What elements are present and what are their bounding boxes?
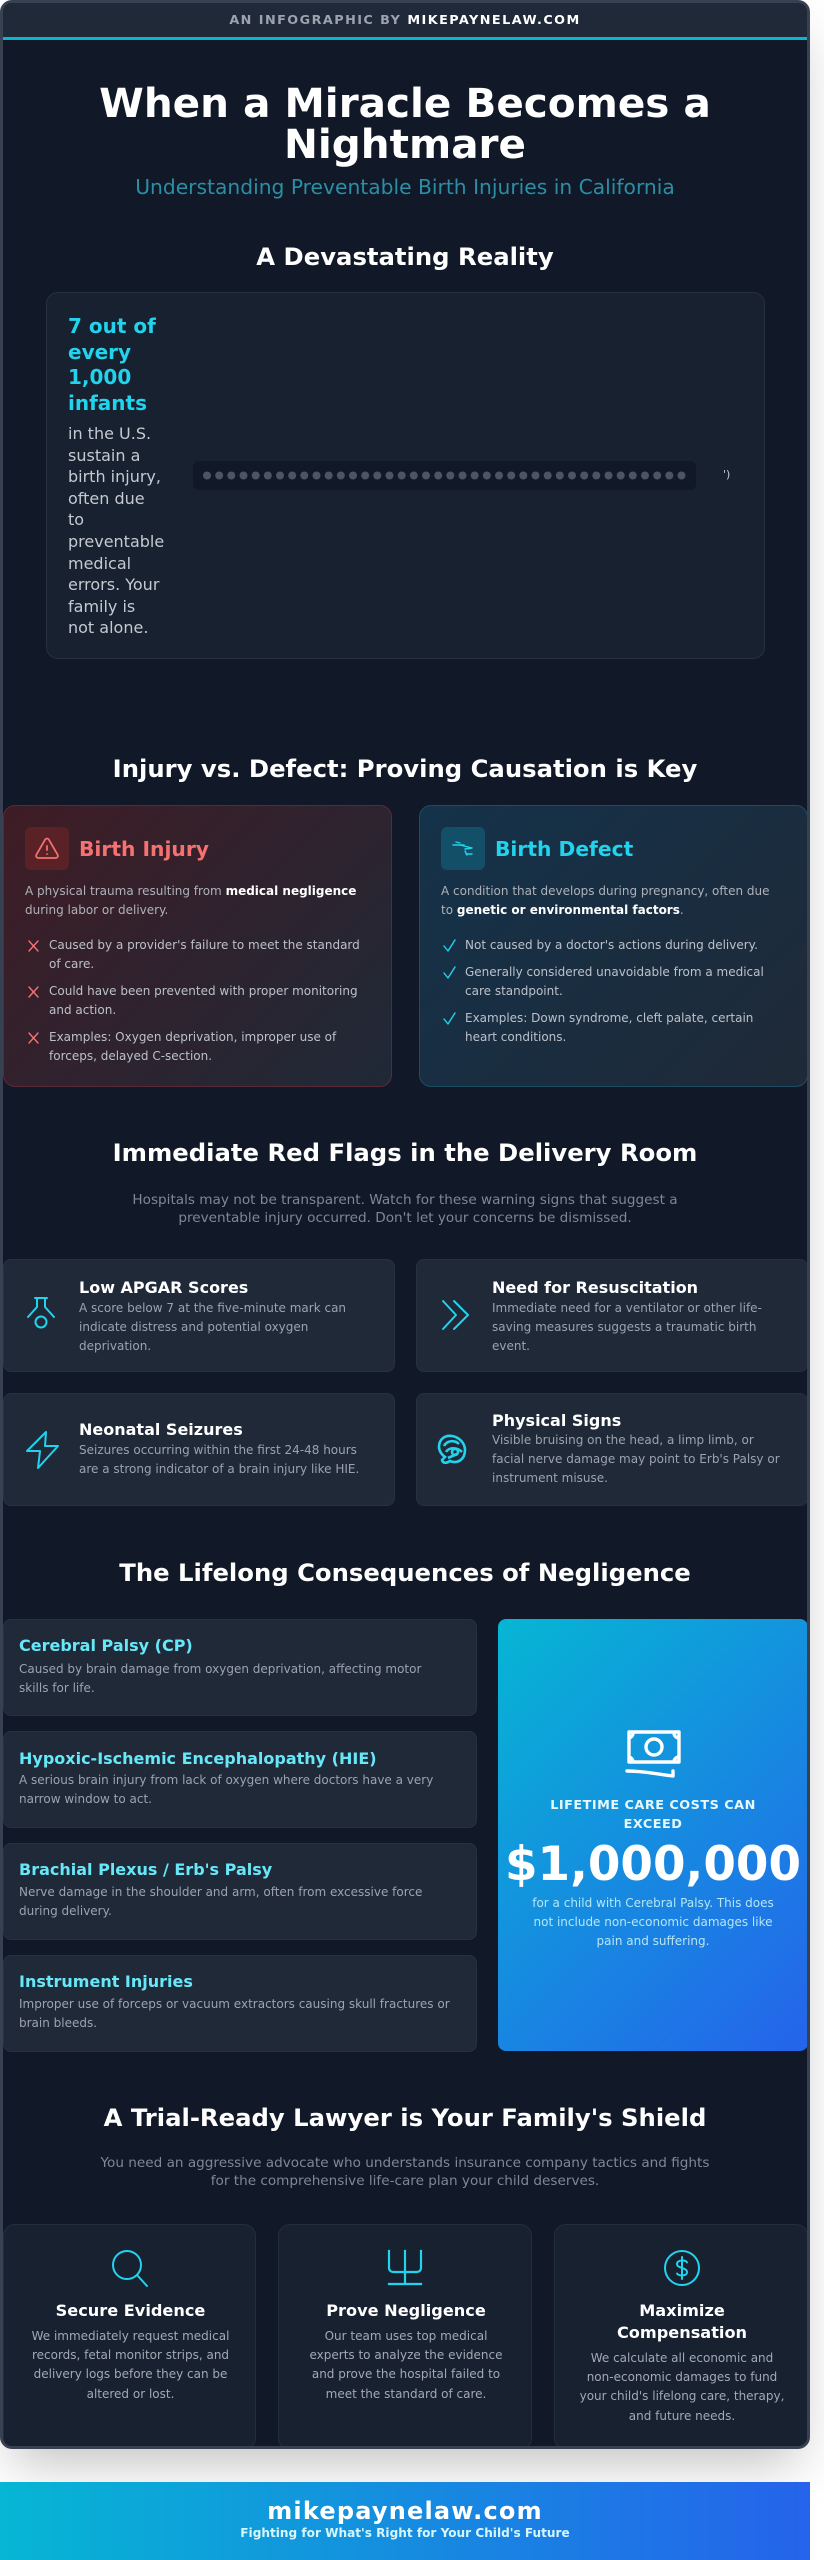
icon: warning: [25, 827, 69, 870]
card: Low APGAR: indicate distress and potential oxygen: [79, 1320, 308, 1334]
card: Maximize Compensation: Compensation: [617, 2323, 747, 2342]
description: A physical trauma resulting from medical negligence: [25, 884, 356, 898]
heading: Shield: A Trial-Ready Lawyer is Your Family's Shield: [104, 2103, 706, 2132]
card: Secure Evidence: [3, 2224, 256, 2450]
stat text: sustain a: [68, 446, 140, 465]
list: forceps, delayed C-section.: [49, 1049, 212, 1063]
card: Need for Resuscitation: event.: [492, 1339, 530, 1353]
card: Prove Negligence: [278, 2224, 532, 2450]
section intro: [132, 1192, 678, 1226]
title: [99, 79, 711, 168]
stat text: to: [68, 510, 84, 529]
description: to genetic or environmental factors.: [441, 903, 684, 917]
icon: magnifier: [112, 2250, 148, 2287]
list: Caused by a provider's failure to meet the standard: [49, 938, 360, 952]
card: Secure Evidence: Secure Evidence: [56, 2301, 205, 2320]
section intro: [100, 2155, 709, 2189]
footer banner: [0, 2482, 810, 2560]
card: Neonatal Seizures: [3, 1393, 395, 1506]
stat text: errors. Your: [68, 575, 159, 594]
description: [25, 884, 356, 917]
card: Instrument Injuries: [3, 1955, 477, 2052]
stat highlight: [68, 314, 156, 415]
icon: defect: [441, 827, 485, 870]
card: Prove Negligence: experts to analyze the evidence: [310, 2348, 502, 2362]
card: Physical Signs: facial nerve damage may point to Erb's Palsy or: [492, 1452, 780, 1466]
list: Generally considered unavoidable from a medical: [465, 965, 764, 979]
stat text: birth injury,: [68, 467, 161, 486]
card: Secure Evidence: records, fetal monitor strips, and: [32, 2348, 229, 2362]
card: Brachial Plexus: [3, 1843, 477, 1940]
title: Birth Defect: [495, 837, 633, 861]
description: A condition that develops during pregnancy, often due: [441, 884, 770, 898]
card: Cerebral Palsy: Cerebral Palsy (CP): [19, 1636, 193, 1655]
icon: bolt: [26, 1431, 59, 1469]
card: Physical Signs: Visible bruising on the head, a limp limb, or: [492, 1433, 754, 1447]
title: Birth Injury: [79, 837, 209, 861]
card: Maximize Compensation: your child's lifelong care, therapy,: [580, 2389, 784, 2403]
card: Instrument Injuries: Improper use of forceps or vacuum extractors causing skull fractures or: [19, 1997, 450, 2011]
card: Prove Negligence: meet the standard of care.: [326, 2387, 486, 2401]
card: Physical Signs: [416, 1393, 808, 1506]
list: [28, 938, 360, 1063]
section intro: for the comprehensive life-care plan your child deserves.: [211, 2173, 599, 2189]
icon: bruises: [438, 1434, 466, 1464]
card: Low APGAR: deprivation.: [79, 1339, 151, 1353]
stat text: not alone.: [68, 618, 148, 637]
description: during labor or delivery.: [25, 903, 168, 917]
stat text: family is: [68, 597, 135, 616]
stat text: often due: [68, 489, 145, 508]
title: When a Miracle Becomes a: [99, 79, 711, 127]
card: Prove Negligence: Our team uses top medical: [325, 2329, 487, 2343]
card: Neonatal Seizures: Seizures occurring within the first 24-48 hours: [79, 1443, 357, 1457]
text: Neonatal Seizures: [79, 1420, 243, 1439]
stat highlight: 1,000: [68, 365, 131, 389]
panel: lifetime cost: [498, 1619, 808, 2051]
dot row: [193, 461, 696, 490]
section intro: Hospitals may not be transparent. Watch for these warning signs that suggest a: [132, 1192, 678, 1208]
footer tagline: Fighting for What's Right for Your Child's Future: [240, 2526, 570, 2540]
stat text: medical: [68, 554, 131, 573]
text: Physical Signs: [492, 1411, 621, 1430]
heading: A Devastating Reality: A Devastating Reality: [256, 242, 554, 271]
card: Low APGAR: [3, 1259, 395, 1372]
icon: banknote: [625, 1730, 681, 1778]
card: Instrument Injuries: brain bleeds.: [19, 2016, 97, 2030]
card: Maximize Compensation: We calculate all economic and: [591, 2351, 773, 2365]
panel: birth defect: [419, 805, 808, 1087]
card: Cerebral Palsy: skills for life.: [19, 1681, 95, 1695]
card: Maximize Compensation: and future needs.: [629, 2409, 735, 2423]
card: Prove Negligence: Prove Negligence: [326, 2301, 486, 2320]
subtitle: Understanding Preventable Birth Injuries in California: [135, 175, 675, 199]
list: [443, 938, 764, 1044]
list: Examples: Down syndrome, cleft palate, certain: [465, 1011, 753, 1025]
heading: Injury vs Defect: Injury vs. Defect: Proving Causation is Key: [113, 754, 697, 783]
card: Instrument Injuries: Instrument Injuries: [19, 1972, 193, 1991]
stat highlight: every: [68, 340, 131, 364]
note: [532, 1896, 774, 1948]
icon: scales: [388, 2250, 422, 2286]
list: Examples: Oxygen deprivation, improper use of: [49, 1030, 336, 1044]
list: care standpoint.: [465, 984, 563, 998]
list: Not caused by a doctor's actions during delivery.: [465, 938, 758, 952]
list: heart conditions.: [465, 1030, 566, 1044]
note: pain and suffering.: [597, 1934, 709, 1948]
icon: dollar: [664, 2250, 700, 2286]
note: not include non-economic damages like: [534, 1915, 772, 1929]
stray characters: '): [723, 468, 730, 481]
card: HIE: [3, 1731, 477, 1828]
card: HIE: A serious brain injury from lack of oxygen where doctors have a very: [19, 1773, 433, 1787]
card: Brachial Plexus: Brachial Plexus / Erb's Palsy: [19, 1860, 272, 1879]
icon: chevrons: [442, 1300, 469, 1330]
card: Neonatal Seizures: are a strong indicator of a brain injury like HIE.: [79, 1462, 359, 1476]
card: Maximize Compensation: non-economic damages to fund: [587, 2370, 777, 2384]
amount: $1,000,000: [505, 1838, 801, 1892]
list: Could have been prevented with proper monitoring: [49, 984, 358, 998]
label: EXCEED: [624, 1817, 682, 1832]
card: Cerebral Palsy: [3, 1619, 477, 1716]
list: and action.: [49, 1003, 116, 1017]
card: Need for Resuscitation: Immediate need for a ventilator or other life-: [492, 1301, 762, 1315]
card: Secure Evidence: altered or lost.: [87, 2387, 174, 2401]
list: of care.: [49, 957, 94, 971]
text: Need for Resuscitation: [492, 1278, 698, 1297]
heading: Red Flags: Immediate Red Flags in the Delivery Room: [113, 1138, 697, 1167]
heading: Consequences: The Lifelong Consequences of Negligence: [119, 1558, 691, 1587]
panel: birth injury: [3, 805, 392, 1087]
note: for a child with Cerebral Palsy. This does: [532, 1896, 774, 1910]
stat highlight: infants: [68, 391, 147, 415]
card: Brachial Plexus: Nerve damage in the shoulder and arm, often from excessive force: [19, 1885, 422, 1899]
description: [441, 884, 770, 917]
section intro: You need an aggressive advocate who understands insurance company tactics and fights: [101, 2155, 709, 2171]
card: HIE: Hypoxic-Ischemic Encephalopathy (HIE): [19, 1749, 377, 1768]
title: Nightmare: [284, 120, 526, 168]
card: Low APGAR: A score below 7 at the five-minute mark can: [79, 1301, 346, 1315]
card: Secure Evidence: delivery logs before they can be: [34, 2367, 227, 2381]
stat text: preventable: [68, 532, 164, 551]
card: Secure Evidence: We immediately request medical: [32, 2329, 229, 2343]
label: [550, 1798, 756, 1832]
card: Prove Negligence: and prove the hospital failed to: [312, 2367, 500, 2381]
card: Need for Resuscitation: saving measures suggests a traumatic birth: [492, 1320, 756, 1334]
icon: flask: [27, 1297, 55, 1328]
label: LIFETIME CARE COSTS CAN: [550, 1798, 756, 1813]
card: Need for Resuscitation: [416, 1259, 808, 1372]
section intro: preventable injury occurred. Don't let your concerns be dismissed.: [178, 1210, 632, 1226]
card: Cerebral Palsy: Caused by brain damage from oxygen deprivation, affecting motor: [19, 1662, 421, 1676]
header bar: [3, 3, 807, 40]
card: Maximize Compensation: [554, 2224, 808, 2450]
card: Maximize Compensation: Maximize: [639, 2301, 725, 2320]
footer site name: mikepaynelaw.com: [267, 2497, 543, 2525]
stat text: [68, 424, 164, 637]
header bar: AN INFOGRAPHIC BY MIKEPAYNELAW.COM: [229, 13, 581, 28]
card: Physical Signs: instrument misuse.: [492, 1471, 608, 1485]
text: Low APGAR Scores: [79, 1278, 248, 1297]
card: HIE: narrow window to act.: [19, 1792, 152, 1806]
stat text: in the U.S.: [68, 424, 151, 443]
card: Brachial Plexus: during delivery.: [19, 1904, 112, 1918]
panel: statistic: [46, 292, 765, 659]
stat highlight: 7 out of: [68, 314, 156, 338]
